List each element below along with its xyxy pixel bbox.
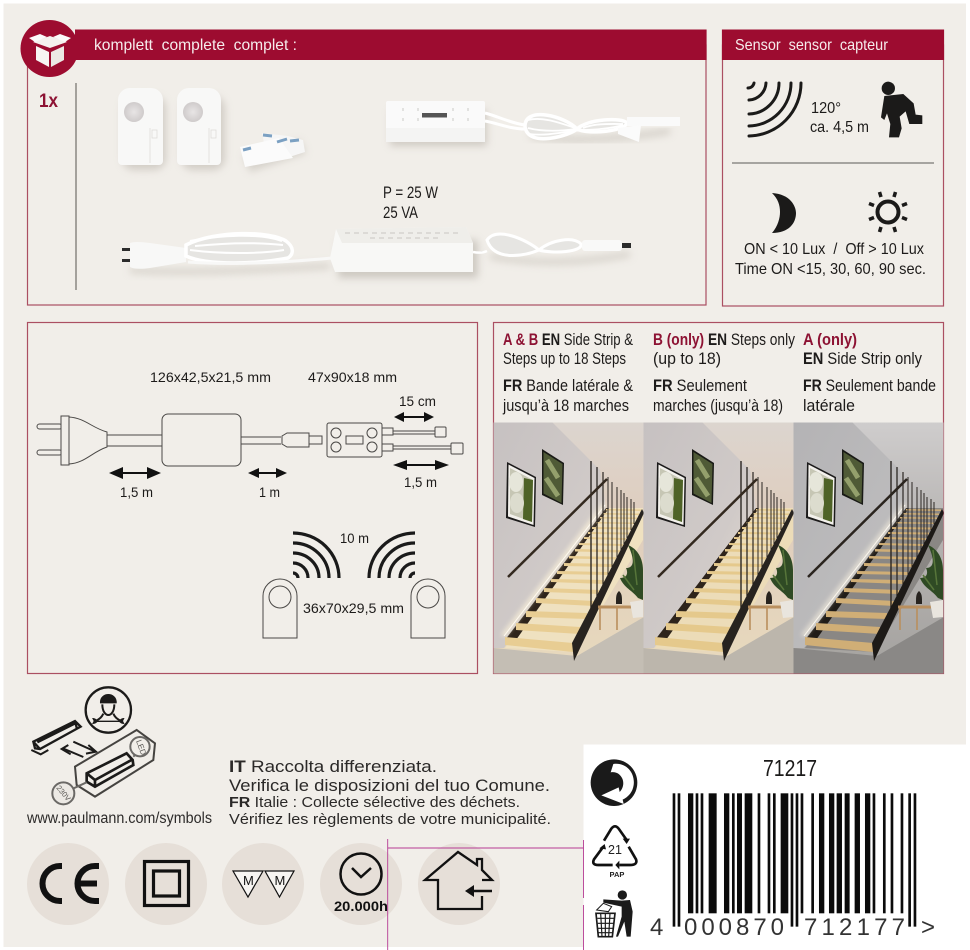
icon: indoor use house <box>418 843 500 925</box>
text: variant A only: latérale <box>803 397 855 415</box>
icon: tidy man <box>596 890 633 937</box>
cable length labels: 1 m <box>259 484 280 500</box>
text: variant A only: A (only) <box>803 331 857 349</box>
illustration: staircase with side strip lit only <box>793 422 944 674</box>
product: adhesive pads <box>240 133 306 172</box>
arrow: 15 cm <box>394 412 434 422</box>
panel: wiring dimensions <box>28 322 478 674</box>
cable length labels <box>120 474 437 500</box>
text: variant A and B: Steps up to 18 Steps <box>503 350 626 368</box>
product: LED driver with mains plug and cables <box>122 227 631 278</box>
icon: open box <box>20 20 78 77</box>
text: variant A and B <box>502 331 633 415</box>
icon: detection waves <box>748 83 801 136</box>
icon: furniture mounting MM mark <box>222 843 304 925</box>
barcode digits: 712177 <box>804 914 905 941</box>
icon: furniture mounting MM mark: M <box>274 873 285 888</box>
barcode digits <box>650 914 935 941</box>
illustration: staircase with side strip and steps lit <box>493 422 644 674</box>
icon: protection class II <box>125 843 207 925</box>
product: distribution hub with cable <box>386 101 680 146</box>
power rating label: P = 25 W <box>383 184 438 202</box>
text: variant B only: marches (jusqu’à 18) <box>653 397 783 415</box>
icon: moon <box>772 193 796 233</box>
barcode digits: 000870 <box>684 914 784 941</box>
power rating label: 25 VA <box>383 204 418 222</box>
header text: komplett complete complet : <box>94 37 297 54</box>
text: variant B only <box>653 331 796 415</box>
arrow: 1 m cable <box>248 468 287 478</box>
lux and time text: ON < 10 Lux / Off > 10 Lux <box>744 241 924 258</box>
text: variant A only <box>803 331 936 415</box>
icon: recycling code 21 PAP <box>593 826 636 879</box>
icon: recycling code 21 PAP: 21 <box>608 843 622 857</box>
sensor header bar <box>722 30 944 60</box>
article number: 71217 <box>763 755 817 781</box>
icon: right sensor outline <box>411 579 445 638</box>
panel: installation variants <box>493 322 944 674</box>
text: variant A and B: jusqu’à 18 marches <box>502 397 629 415</box>
icon: lifetime clock 20.000 h <box>320 843 402 925</box>
text: variant A only: FR Seulement bande <box>803 377 936 395</box>
arrow: 1,5 m mains cable <box>109 467 161 479</box>
power rating label <box>383 184 438 222</box>
cable length labels: 1,5 m <box>404 474 437 490</box>
text: variant B only: FR Seulement <box>653 377 747 395</box>
dimension labels: 15 cm <box>399 393 436 409</box>
icon: sun <box>869 192 907 232</box>
cable length labels: 1,5 m <box>120 484 153 500</box>
recycling notice: FR Italie : Collecte sélective des déchets. <box>229 794 520 811</box>
quantity label: 1x <box>39 91 58 112</box>
dimension labels: 126x42,5x21,5 mm <box>150 369 271 385</box>
arrow: 1,5 m output cable <box>393 460 449 470</box>
wireless range label: 10 m <box>340 530 369 546</box>
text: variant B only: (up to 18) <box>653 350 721 368</box>
detection range text: 120° <box>811 100 841 117</box>
label: 230V: 230V <box>54 784 73 803</box>
icon: running person <box>881 82 922 137</box>
dimension labels <box>150 369 436 409</box>
recycling notice <box>229 757 551 828</box>
barcode <box>650 793 935 941</box>
icon: installer and LED driver replacement <box>31 687 155 804</box>
label: LED: LED <box>134 739 148 757</box>
header bar: komplett <box>75 30 707 60</box>
sensor header text: Sensor sensor capteur <box>735 37 889 54</box>
icon: green dot <box>591 759 637 806</box>
text: variant B only: B (only) EN Steps only <box>653 331 796 349</box>
lux and time text <box>735 241 926 278</box>
icon: right wireless waves <box>369 533 415 578</box>
lux and time text: Time ON <15, 30, 60, 90 sec. <box>735 261 926 278</box>
illustration: staircase with steps lit only <box>643 422 794 674</box>
sensor size label: 36x70x29,5 mm <box>303 600 404 616</box>
text: variant A only: EN Side Strip only <box>803 350 923 368</box>
print crop lines <box>388 839 584 950</box>
icon: furniture mounting MM mark: M <box>243 873 254 888</box>
panel: complete set contents <box>20 20 707 305</box>
recycling notice: IT Raccolta differenziata. <box>229 757 437 776</box>
product: two motion sensors <box>118 88 225 170</box>
text: variant A and B: A & B EN Side Strip & <box>503 331 633 349</box>
text: variant A and B: FR Bande latérale & <box>503 377 633 395</box>
panel: packaging codes <box>584 745 970 950</box>
icon: CE mark <box>27 843 109 925</box>
icon: left sensor outline <box>263 579 297 638</box>
symbols url: www.paulmann.com/symbols <box>26 810 212 827</box>
barcode digits: > <box>921 914 935 941</box>
icon: left wireless waves <box>293 533 339 578</box>
wiring diagram <box>37 414 463 466</box>
recycling notice: Verifica le disposizioni del tuo Comune. <box>229 776 550 795</box>
icon: recycling code 21 PAP: PAP <box>610 870 624 879</box>
recycling notice: Vérifiez les règlements de votre municipalité. <box>229 811 551 828</box>
panel: sensor specifications <box>722 30 944 306</box>
dimension labels: 47x90x18 mm <box>308 369 397 385</box>
detection range text <box>810 100 869 136</box>
barcode digits: 4 <box>650 914 663 941</box>
detection range text: ca. 4,5 m <box>810 119 869 136</box>
icon: lifetime clock 20.000 h: 20.000h <box>334 899 388 914</box>
